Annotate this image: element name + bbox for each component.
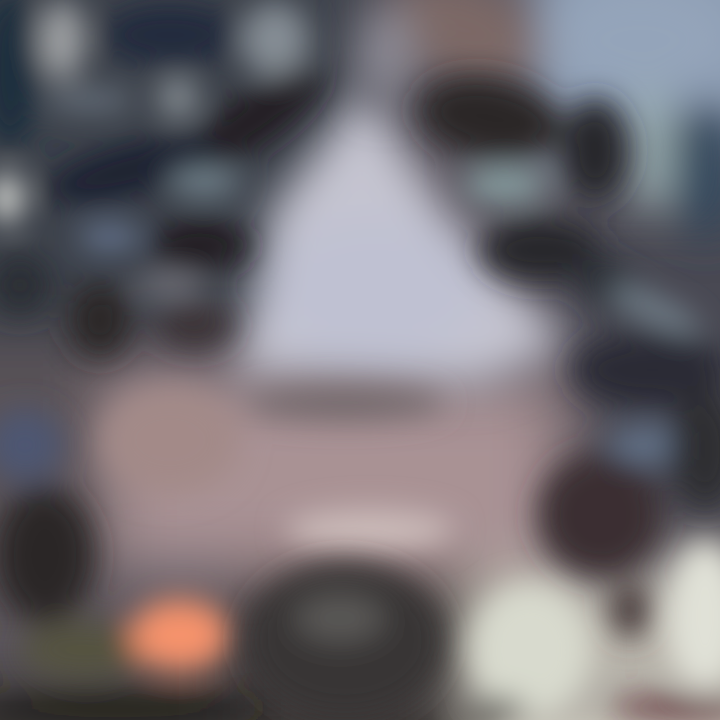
horizontal shadow across centre bbox=[100, 385, 455, 550]
bottom centre dark form bbox=[245, 562, 445, 718]
bottom left dark and orange glow bbox=[0, 409, 270, 720]
central pale triangle bbox=[235, 85, 570, 385]
dark shapes right of triangle bbox=[412, 66, 720, 638]
top left dark clusters bbox=[0, 0, 335, 358]
top right brown and blue bbox=[357, 0, 720, 240]
bottom right pale area bbox=[465, 540, 720, 719]
